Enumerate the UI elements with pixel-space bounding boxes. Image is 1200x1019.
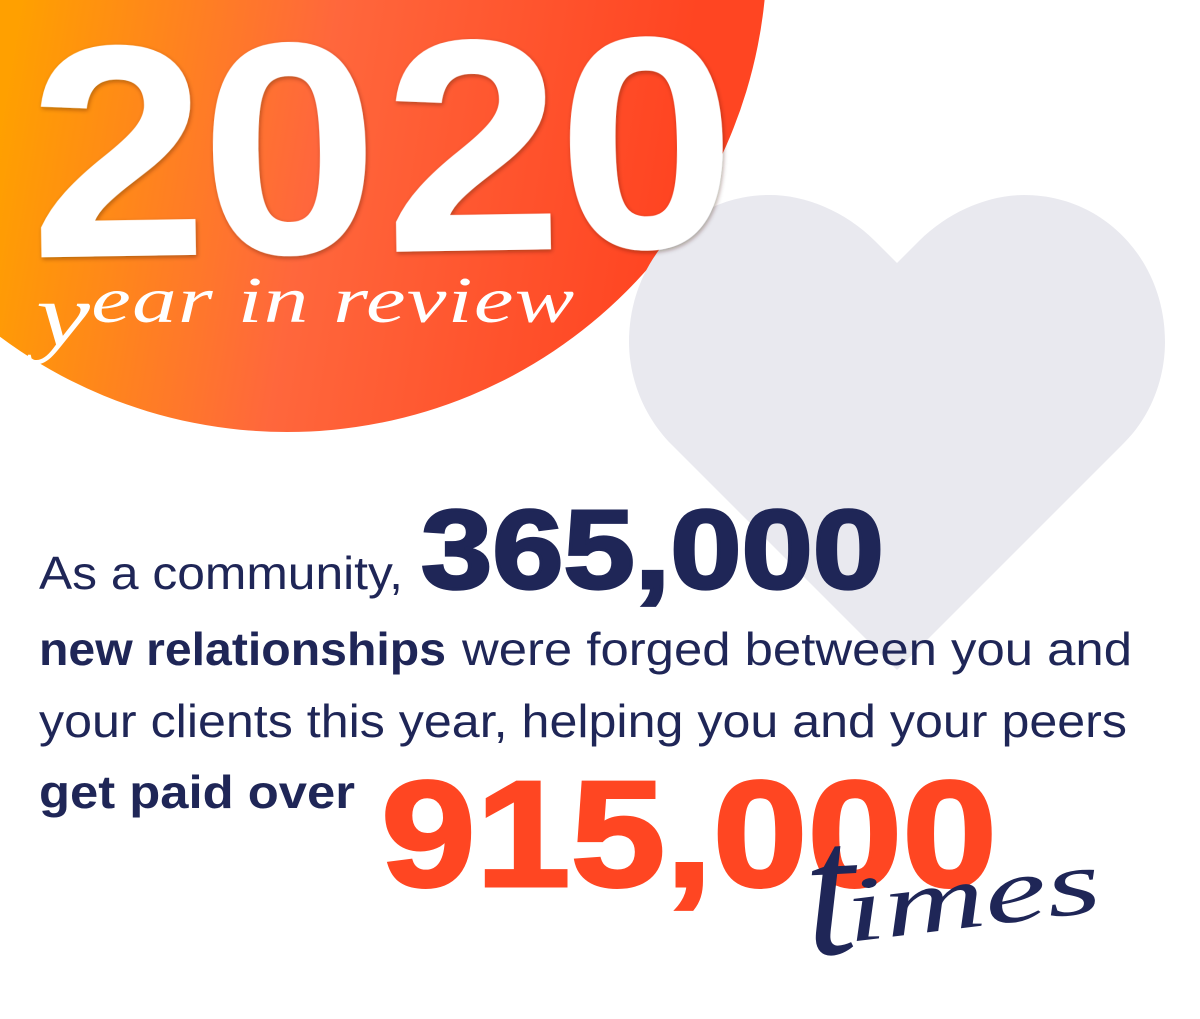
line: your clients this year: your clients this year, helping you and your peers	[39, 695, 1127, 747]
script word: times: imes	[839, 830, 1106, 962]
subtitle: year in review: y	[26, 266, 91, 365]
background circle with gradient	[0, 0, 767, 432]
text block: community statistic	[39, 487, 1132, 818]
icon: grey heart	[629, 195, 1165, 670]
line: get paid over: get paid over	[39, 766, 355, 818]
script word: times: t	[799, 784, 865, 997]
number: 915,000: 915,000	[381, 749, 997, 918]
line: were forged between you and: were forged between you and	[461, 623, 1132, 675]
line: new relationships: new relationships	[39, 623, 446, 675]
script word: times	[799, 784, 1106, 997]
subtitle: year in review: ear in review	[91, 263, 576, 336]
line: as a community: As a community,	[39, 547, 403, 599]
number: 365,000: 365,000	[421, 487, 884, 612]
